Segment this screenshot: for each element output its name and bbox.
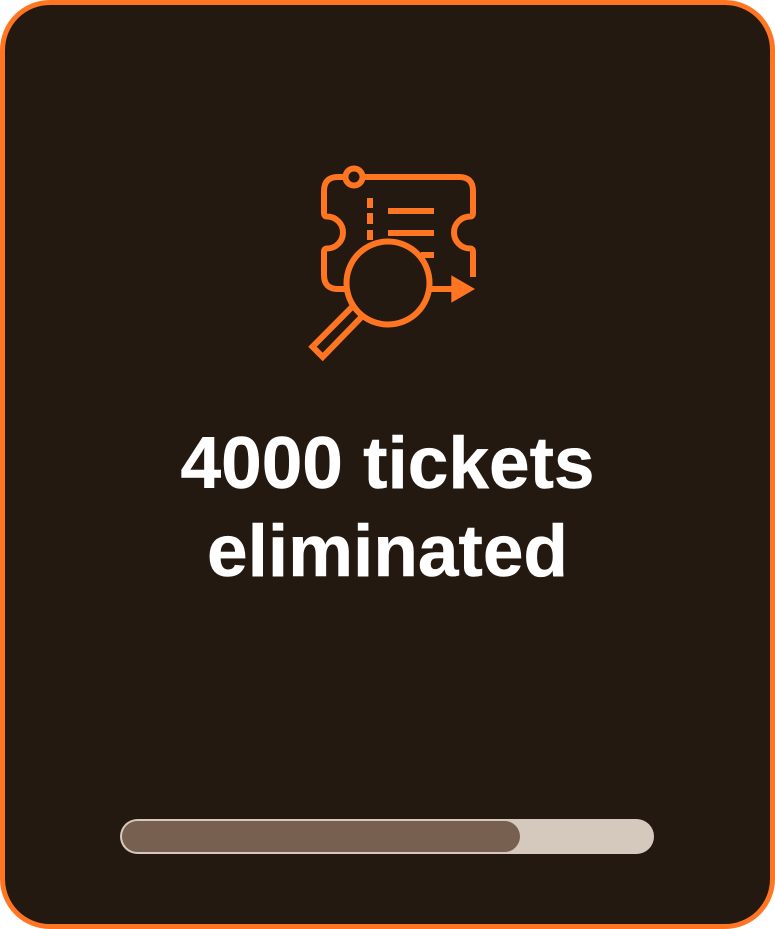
ticket perforation <box>367 198 373 240</box>
ticket punch hole <box>346 168 362 186</box>
heading <box>180 423 594 592</box>
magnifier handle <box>312 307 362 357</box>
magnifier lens <box>346 242 430 324</box>
ticket text lines <box>388 211 434 255</box>
heading: eliminated <box>207 511 568 592</box>
progress fill <box>122 821 520 852</box>
ticket outline <box>324 177 473 289</box>
arrow <box>429 275 475 303</box>
progress bar <box>120 819 654 854</box>
heading: 4000 tickets <box>180 423 594 504</box>
